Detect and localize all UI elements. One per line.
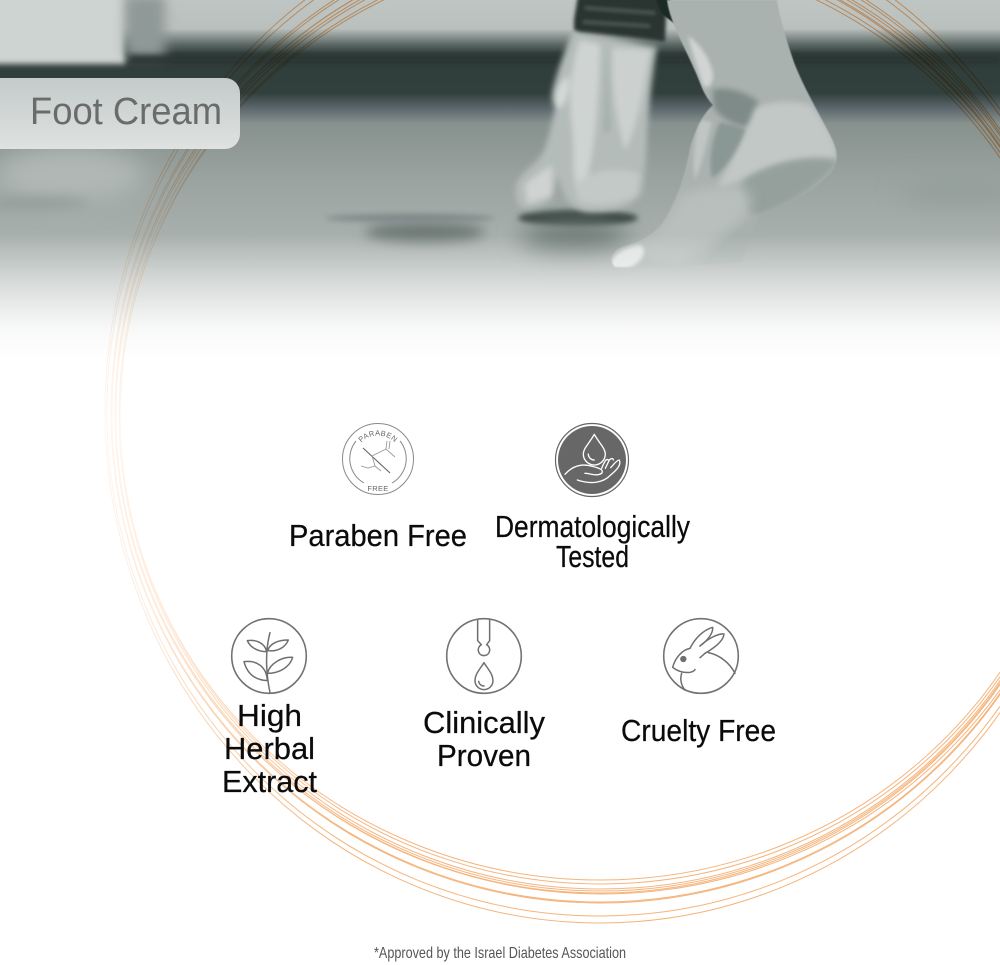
high herbal extract label <box>222 698 317 799</box>
paraben free label: Paraben Free <box>289 518 467 553</box>
left foot (blurred) <box>515 30 657 212</box>
dermatologically tested label: Tested <box>556 539 629 574</box>
high herbal extract label: Extract <box>222 764 317 799</box>
dermatologically tested label <box>495 509 690 574</box>
high herbal extract label: High <box>237 698 302 733</box>
clinically proven label: Clinically <box>423 705 545 740</box>
cruelty free label: Cruelty Free <box>621 713 776 748</box>
high herbal extract label: Herbal <box>224 731 315 766</box>
icon: paraben free: PARABEN <box>358 430 398 442</box>
icon: dermatologically tested <box>556 424 628 496</box>
icon: rabbit <box>664 619 738 693</box>
product label pill <box>0 78 240 149</box>
footnote: *Approved by the Israel Diabetes Association <box>374 945 626 962</box>
icon: paraben free: FREE <box>367 484 389 493</box>
clinically proven label <box>423 705 545 773</box>
right foot (in focus) <box>610 0 838 270</box>
title: Foot Cream <box>30 91 222 133</box>
photo: feet on a studio floor <box>0 0 1000 360</box>
dark trousers hem <box>574 0 667 42</box>
icon: paraben free <box>342 423 414 495</box>
icon: herbal leaves <box>232 619 306 693</box>
icon: dropper <box>447 619 521 693</box>
dermatologically tested label: Dermatologically <box>495 509 690 544</box>
clinically proven label: Proven <box>437 738 531 773</box>
